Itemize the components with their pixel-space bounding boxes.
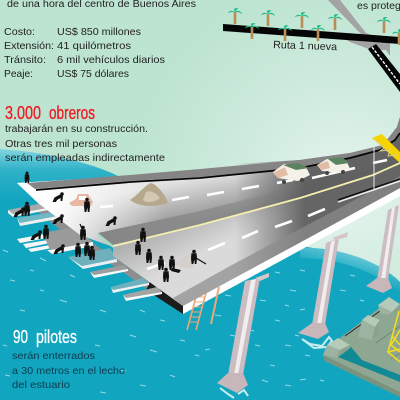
- workers heading: [5, 103, 95, 123]
- pillar 3: [366, 205, 399, 293]
- bridge white underside edge: [183, 188, 400, 314]
- data sheet: US$ 75 dólares: [57, 68, 129, 80]
- platform barge: [323, 297, 400, 397]
- black curb line: [36, 133, 400, 190]
- workers text: Otras tres mil personas: [5, 138, 117, 150]
- data sheet: Costo:: [4, 26, 35, 38]
- dark deck underside: [146, 282, 183, 314]
- data sheet: 41 quilómetros: [57, 40, 131, 52]
- palm trees: [228, 8, 400, 45]
- workers text: [5, 123, 165, 164]
- workers heading: obreros: [49, 103, 95, 123]
- dump truck 1: [273, 163, 310, 184]
- water ripples: [3, 250, 364, 393]
- crane cable: [373, 147, 375, 190]
- workers heading: 3.000: [5, 103, 41, 123]
- near lane surface: [113, 163, 400, 306]
- piles heading: 90: [13, 327, 28, 347]
- data sheet: US$ 850 millones: [57, 26, 141, 38]
- yellow tower: [388, 311, 400, 362]
- yellow crane arm: [372, 134, 400, 163]
- workers: [14, 172, 206, 282]
- construction ladders: [187, 287, 219, 330]
- piles text: a 30 metros en el lecho: [12, 365, 125, 377]
- lane dashes: [100, 160, 387, 269]
- workers text: trabajarán en su construcción.: [5, 123, 148, 135]
- dump truck 2: [317, 157, 350, 175]
- median strip: [98, 187, 300, 245]
- under-deck side band: [36, 203, 183, 314]
- small sand pile: [175, 254, 194, 268]
- data sheet: Extensión:: [4, 40, 54, 52]
- near lane outer band: [173, 176, 400, 306]
- data sheet: [4, 26, 165, 80]
- piles text: serán enterrados: [12, 350, 95, 362]
- median green edge: [98, 233, 113, 248]
- data sheet: Peaje:: [4, 68, 33, 80]
- anchor block 1: [323, 338, 350, 358]
- pink machine: [69, 194, 93, 206]
- grey overpass ramp: [328, 0, 390, 56]
- route label: Ruta 1 nueva: [273, 39, 337, 53]
- workers text: serán empleadas indirectamente: [5, 152, 165, 164]
- sand pile: [130, 183, 168, 206]
- pillar splash foam: [220, 337, 332, 398]
- yellow centre line: [113, 163, 400, 246]
- data sheet: Tránsito:: [4, 54, 46, 66]
- road: ruta 1 nueva: [223, 8, 400, 45]
- anchor block 2: [358, 315, 380, 340]
- deck dark shading: [235, 117, 400, 278]
- piles text: del estuario: [12, 379, 70, 391]
- water edge glow: [300, 248, 400, 292]
- far lane surface: [17, 117, 400, 247]
- piles heading: [13, 327, 77, 347]
- anchor block 3: [378, 297, 400, 315]
- formwork slabs: [8, 203, 162, 301]
- pillar 2: [298, 232, 348, 339]
- piles text: [12, 350, 125, 391]
- pillar 1: [217, 273, 269, 393]
- data sheet: 6 mil vehículos diarios: [57, 54, 165, 66]
- top lane kerb: [27, 117, 400, 189]
- piles heading: pilotes: [36, 327, 77, 347]
- far lane white shading: [17, 172, 170, 247]
- lane divider: [338, 179, 400, 202]
- water: [0, 149, 400, 400]
- access ramp: [368, 44, 400, 92]
